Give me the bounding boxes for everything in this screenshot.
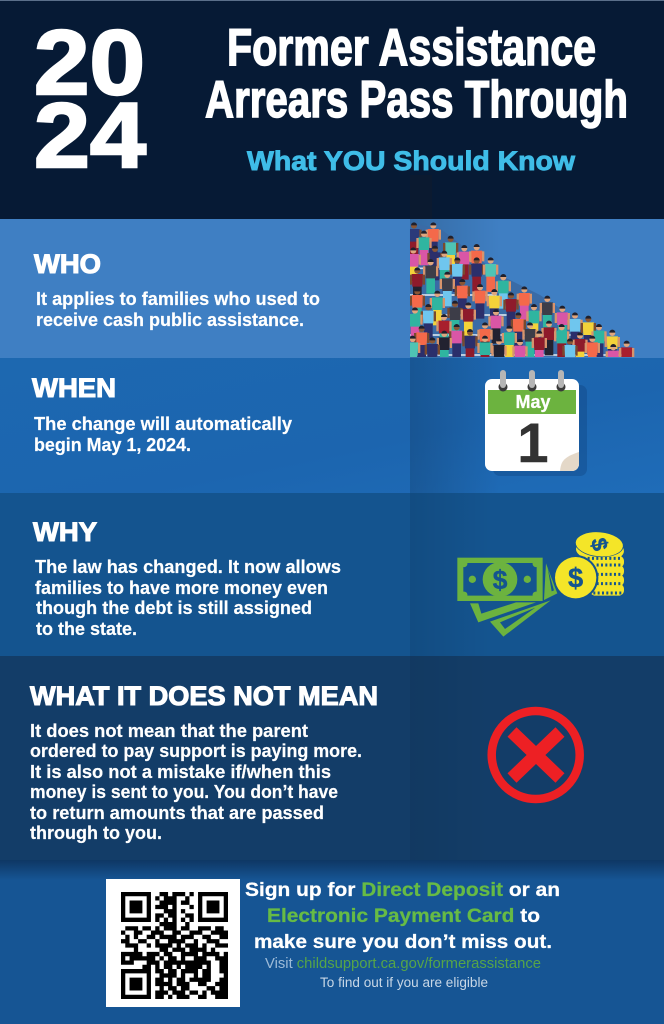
- text: sign up call to action: Electronic Payment Card to: [267, 906, 540, 927]
- text: who: It applies to families who used to: [36, 289, 320, 309]
- panel: who: [0, 219, 664, 358]
- front bill: $: [493, 565, 508, 595]
- icon: red x: [492, 711, 580, 799]
- panel: footer: [0, 860, 664, 1024]
- coin stack: [553, 530, 625, 600]
- text: why: The law has changed. It now allows: [35, 557, 341, 577]
- text: what it does not mean: [30, 721, 362, 843]
- text: who: [36, 289, 320, 330]
- panel: what it does not mean: [0, 656, 664, 860]
- year 2024: [34, 12, 146, 187]
- icon: calendar: May: [515, 392, 551, 412]
- text: why: to the state.: [36, 619, 137, 639]
- text: sign up call to action: Sign up for Direct Deposit or an: [245, 880, 560, 901]
- panel: why: [0, 493, 664, 656]
- icon: calendar: 1: [517, 411, 549, 474]
- text: sign up call to action: [245, 880, 560, 953]
- text: what it does not mean: It is also not a mistake if/when this: [30, 762, 331, 782]
- heading: who: WHO: [34, 249, 101, 279]
- text: eligibility: To find out if you are eligible: [320, 975, 488, 990]
- coin stack: $: [586, 536, 613, 553]
- text: who: receive cash public assistance.: [36, 310, 304, 330]
- year 2024: 24: [34, 85, 146, 187]
- text: website: Visit childsupport.ca.gov/formerassistance: [265, 955, 541, 972]
- icon: money bills and coins: [457, 530, 625, 637]
- title: [205, 19, 628, 129]
- year 2024: 20: [34, 12, 145, 114]
- text: what it does not mean: It does not mean that the parent: [30, 721, 308, 741]
- text: when: The change will automatically: [34, 414, 292, 434]
- heading: what it does not mean: WHAT IT DOES NOT MEAN: [30, 681, 378, 711]
- panel: when: [0, 358, 664, 493]
- heading: when: WHEN: [32, 373, 116, 403]
- text: what it does not mean: money is sent to you. You don’t have: [30, 782, 338, 802]
- text: what it does not mean: ordered to pay support is paying more.: [30, 741, 362, 761]
- qr code: [106, 879, 240, 1007]
- text: what it does not mean: to return amounts that are passed: [30, 803, 324, 823]
- back bills: [470, 563, 557, 637]
- subtitle: What YOU Should Know: [247, 146, 576, 176]
- text: when: [34, 414, 292, 455]
- text: why: families to have more money even: [35, 578, 328, 598]
- front bill: [457, 558, 543, 601]
- coin stack: $: [568, 563, 583, 594]
- panel: header: [0, 0, 664, 219]
- heading: why: WHY: [33, 517, 97, 547]
- illustration: crowd of people: [410, 222, 634, 357]
- text: what it does not mean: through to you.: [30, 823, 162, 843]
- text: when: begin May 1, 2024.: [34, 435, 191, 455]
- text: sign up call to action: make sure you don’t miss out.: [254, 932, 552, 953]
- text: why: though the debt is still assigned: [36, 598, 312, 618]
- icon: calendar: [485, 370, 587, 476]
- text: why: [35, 557, 341, 639]
